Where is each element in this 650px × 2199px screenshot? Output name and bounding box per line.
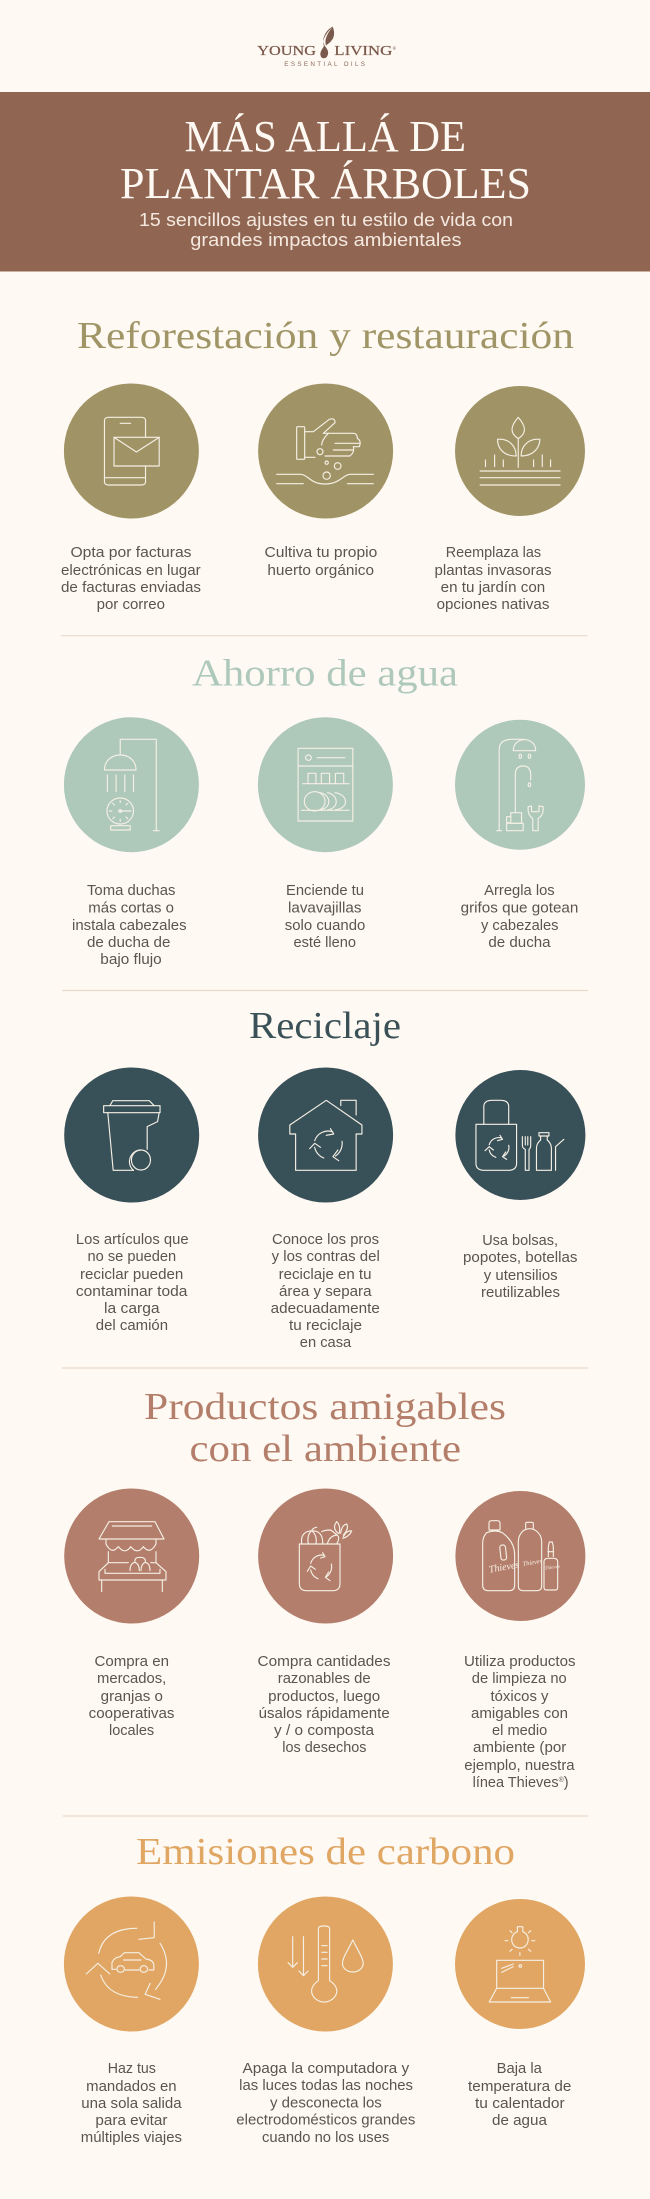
caption: mercados [89,1654,174,1739]
icon: dishwasher [258,717,393,852]
heading: Reforestación y restauración [77,315,574,357]
caption: duchas: instala cabezales [72,918,187,934]
caption: mercados: Compra en [94,1654,169,1670]
caption: calentador [468,2061,571,2129]
caption: duchas: Toma duchas [87,883,175,899]
caption: huerto [264,545,377,579]
caption: plantas: plantas invasoras [434,563,552,579]
caption: articulos: del camión [96,1318,168,1334]
title: MÁS ALLÁ DE [184,112,466,161]
caption: calentador: Baja la [497,2061,543,2077]
caption: reutilizables: reutilizables [481,1285,560,1301]
logo: Young Living: LIVING [334,44,392,59]
icon: Thieves cleaning bottles: Thieves [522,1558,543,1568]
caption: pros y contras: y los contras del [272,1249,380,1265]
caption: computadora: electrodomésticos grandes [236,2112,415,2128]
caption: facturas [61,545,201,613]
subtitle: grandes impactos ambientales [190,230,462,250]
caption: mandados: para evitar [95,2113,168,2129]
logo: Young Living: ESSENTIAL OILS [284,61,365,68]
caption: lavavajillas: esté lleno [294,935,356,951]
caption: computadora: y desconecta los [270,2096,382,2112]
caption: mandados: mandados en [86,2079,177,2095]
logo: Young Living: ® [392,46,396,52]
caption: reutilizables: popotes, botellas [463,1250,578,1266]
caption: plantas [434,545,552,613]
caption: mercados: mercados, [97,1671,166,1687]
caption: cantidades: y / o composta [274,1723,375,1739]
heading: Ahorro de agua [192,653,458,695]
title [120,112,531,208]
panel: Productos amigables [64,1386,585,1791]
caption: cantidades: úsalos rápidamente [259,1706,390,1722]
caption: mandados: una sola salida [81,2096,183,2112]
caption: limpieza: ambiente (por [473,1740,566,1756]
caption: computadora: las luces todas las noches [239,2078,413,2094]
caption: cantidades: razonables de [278,1671,371,1687]
caption: duchas [72,883,187,968]
icon: plant [455,386,585,516]
caption: facturas: por correo [97,597,165,613]
caption: limpieza: ) [564,1775,569,1791]
caption: limpieza: de limpieza no [472,1671,567,1687]
caption: huerto: Cultiva tu propio [264,545,377,561]
icon: laptop and light bulb [455,1899,585,2029]
caption: mandados: Haz tus [108,2061,156,2077]
caption: computadora [236,2061,415,2146]
heading: Productos amigables [144,1386,506,1428]
caption: limpieza: amigables con [471,1706,568,1722]
caption: articulos [76,1232,189,1334]
icon: car with cycle arrows [64,1896,199,2032]
caption: lavavajillas: lavavajillas [288,901,362,917]
caption: pros y contras: adecuadamente [271,1301,380,1317]
caption: duchas: más cortas o [88,901,174,917]
subtitle: 15 sencillos ajustes en tu estilo de vida con [139,210,513,230]
caption: pros y contras [271,1232,380,1351]
caption: articulos: Los artículos que [76,1232,189,1248]
caption: limpieza [464,1654,576,1791]
caption: lavavajillas [285,883,365,951]
caption: grifos: grifos que gotean [461,901,578,917]
heading: Reciclaje [249,1005,401,1047]
caption: huerto: huerto orgánico [267,563,374,579]
caption: duchas: bajo flujo [100,952,162,968]
icon: leaking faucet and wrench [455,720,585,850]
caption: mercados: cooperativas [89,1706,174,1722]
icon: Thieves cleaning bottles [455,1491,585,1621]
caption: lavavajillas: solo cuando [285,918,365,934]
panel: Reciclaje [64,1005,585,1351]
caption: computadora: cuando no los uses [262,2130,389,2146]
icon: thermometer and drop [258,1896,393,2032]
caption: limpieza: ® [559,1776,565,1784]
caption: articulos: contaminar toda [76,1284,188,1300]
caption: reutilizables: y utensilios [484,1268,558,1284]
heading: con el ambiente [190,1428,461,1470]
caption: grifos: y cabezales [481,918,558,934]
caption: facturas: Opta por facturas [70,545,192,561]
icon: wheeled bin [64,1068,199,1202]
icon: grocery bag [258,1488,393,1624]
caption: limpieza: línea Thieves [473,1775,559,1791]
panel: Reforestación y restauración [61,315,585,613]
icon: market stall [64,1488,199,1624]
caption: mandados [81,2061,183,2146]
caption: cantidades [258,1654,390,1756]
caption: reutilizables [463,1233,578,1301]
caption: calentador: de agua [492,2113,548,2129]
caption: facturas: de facturas enviadas [61,580,201,596]
caption: articulos: no se pueden [88,1249,176,1265]
caption: computadora: Apaga la computadora y [242,2061,410,2077]
caption: cantidades: Compra cantidades [258,1654,390,1670]
caption: mercados: granjas o [101,1689,163,1705]
caption: grifos: Arregla los [484,883,555,899]
icon: house with recycle [258,1068,393,1202]
caption: pros y contras: en casa [300,1335,352,1351]
caption: pros y contras: tu reciclaje [289,1318,362,1334]
caption: limpieza: el medio [492,1723,547,1739]
caption: calentador: temperatura de [468,2079,571,2095]
caption: cantidades: productos, luego [268,1689,380,1705]
caption: plantas: opciones nativas [437,597,549,613]
panel: Ahorro de agua [64,653,585,968]
caption: mandados: múltiples viajes [81,2130,182,2146]
subtitle [139,210,513,250]
banner [0,92,650,272]
caption: pros y contras: reciclaje en tu [279,1267,372,1283]
caption: limpieza: Utiliza productos [464,1654,576,1670]
logo: Young Living [257,27,396,68]
caption: articulos: reciclar pueden [80,1267,183,1283]
logo: Young Living: YOUNG [257,44,316,59]
caption: pros y contras: área y separa [279,1284,372,1300]
icon: shower with clock [64,717,199,852]
caption: limpieza: tóxicos y [490,1689,549,1705]
caption: reutilizables: Usa bolsas, [482,1233,558,1249]
panel: Emisiones de carbono [64,1831,585,2146]
icon: phone with envelope [64,384,199,518]
caption: grifos [461,883,578,951]
heading [144,1386,506,1470]
icon: reusable bag and utensils [455,1070,585,1200]
caption: grifos: de ducha [488,935,552,951]
caption: pros y contras: Conoce los pros [272,1232,379,1248]
caption: plantas: Reemplaza las [446,545,541,561]
caption: calentador: tu calentador [475,2096,565,2112]
icon: Thieves cleaning bottles: Thieves [544,1565,560,1572]
icon: Thieves cleaning bottles: Thieves [488,1560,520,1576]
title: PLANTAR ÁRBOLES [120,159,531,208]
heading: Emisiones de carbono [136,1831,515,1873]
caption: facturas: electrónicas en lugar [61,563,201,579]
caption: duchas: de ducha de [87,935,170,951]
caption: mercados: locales [109,1723,154,1739]
caption: plantas: en tu jardín con [441,580,545,596]
caption: limpieza: ejemplo, nuestra [464,1758,576,1774]
caption: articulos: la carga [104,1301,161,1317]
caption: cantidades: los desechos [282,1740,366,1756]
icon: hand planting seeds [258,384,393,518]
caption: lavavajillas: Enciende tu [286,883,364,899]
